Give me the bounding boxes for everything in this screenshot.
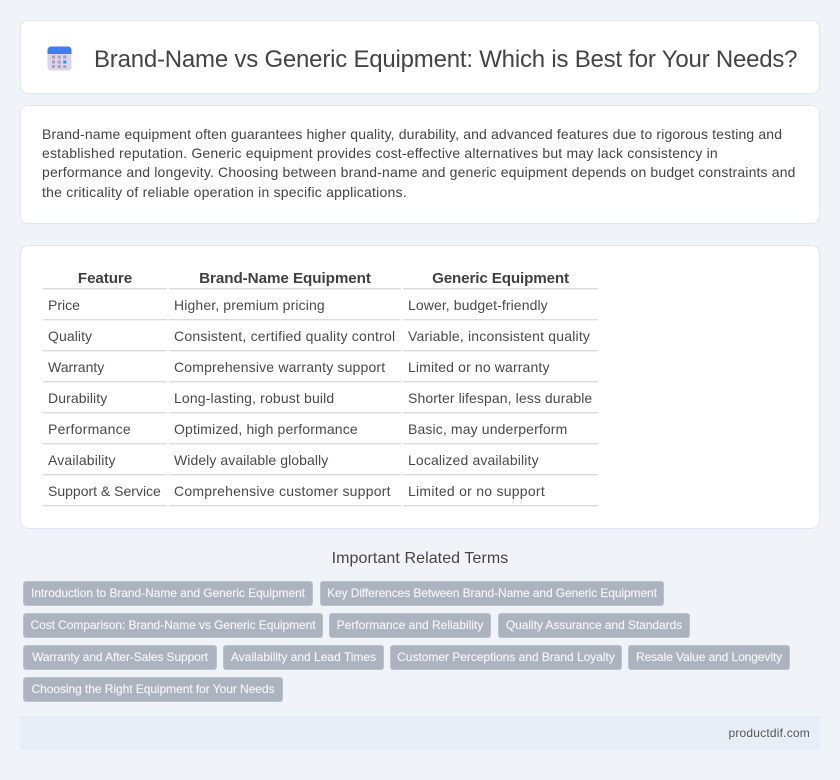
- comparison table: Long-lasting, robust build: [174, 390, 334, 406]
- footer: [20, 716, 820, 750]
- heading: important related terms: Important Related Terms: [332, 550, 508, 567]
- comparison table: Lower, budget-friendly: [408, 297, 548, 313]
- comparison table: Price: [48, 297, 80, 313]
- comparison table: Quality: [48, 328, 92, 344]
- text block: introduction: the criticality of reliable operation in specific applications.: [42, 184, 407, 200]
- panel: header: [20, 20, 820, 94]
- related terms tags: [23, 581, 790, 702]
- footer source: productdif.com: [728, 726, 810, 740]
- related terms tags: Key Differences Between Brand-Name and Generic Equipment: [327, 586, 657, 600]
- comparison table: Comprehensive warranty support: [174, 359, 385, 375]
- comparison table: Durability: [48, 390, 107, 406]
- text block: introduction: Brand-name equipment often guarantees higher quality, durability, and advanced features due to rigorous testing and: [42, 126, 782, 142]
- related terms tags: Customer Perceptions and Brand Loyalty: [397, 650, 615, 664]
- comparison table: Support & Service: [48, 483, 161, 499]
- table header: [78, 270, 569, 286]
- related terms tags: Choosing the Right Equipment for Your Needs: [32, 682, 274, 696]
- related terms tags: Cost Comparison: Brand-Name vs Generic Equipment: [31, 618, 315, 632]
- panel: introduction text: [20, 105, 820, 224]
- comparison table: Basic, may underperform: [408, 421, 567, 437]
- comparison table: Limited or no warranty: [408, 359, 550, 375]
- comparison table: Localized availability: [408, 452, 539, 468]
- comparison table: Limited or no support: [408, 483, 545, 499]
- panel: comparison table: [20, 245, 820, 529]
- comparison table: Optimized, high performance: [174, 421, 358, 437]
- related terms tags: Performance and Reliability: [337, 618, 483, 632]
- text block: introduction: [42, 126, 796, 200]
- text block: introduction: performance and longevity. Choosing between brand-name and generic equipment depends on budget constraints and: [42, 164, 796, 180]
- related terms tags: Availability and Lead Times: [231, 650, 376, 664]
- comparison table: Consistent, certified quality control: [174, 328, 395, 344]
- text block: introduction: established reputation. Generic equipment provides cost-effective alternatives but may lack consistency in: [42, 145, 718, 161]
- related terms tags: Introduction to Brand-Name and Generic Equipment: [31, 586, 305, 600]
- related terms tags: Warranty and After-Sales Support: [32, 650, 208, 664]
- table header: Feature: [78, 270, 132, 286]
- comparison table: Availability: [48, 452, 116, 468]
- related terms tags: Resale Value and Longevity: [636, 650, 782, 664]
- comparison table: Widely available globally: [174, 452, 328, 468]
- icon: calendar: [48, 46, 72, 70]
- comparison table: Higher, premium pricing: [174, 297, 325, 313]
- related terms tags: Quality Assurance and Standards: [506, 618, 682, 632]
- comparison table: [43, 270, 598, 507]
- comparison table: Performance: [48, 421, 131, 437]
- comparison table: Comprehensive customer support: [174, 483, 391, 499]
- table header: Generic Equipment: [432, 270, 569, 286]
- comparison table: Variable, inconsistent quality: [408, 328, 590, 344]
- table header: Brand-Name Equipment: [199, 270, 371, 286]
- comparison table: Shorter lifespan, less durable: [408, 390, 592, 406]
- comparison table: Warranty: [48, 359, 104, 375]
- title: Brand-Name vs Generic Equipment: Which is Best for Your Needs?: [94, 46, 797, 73]
